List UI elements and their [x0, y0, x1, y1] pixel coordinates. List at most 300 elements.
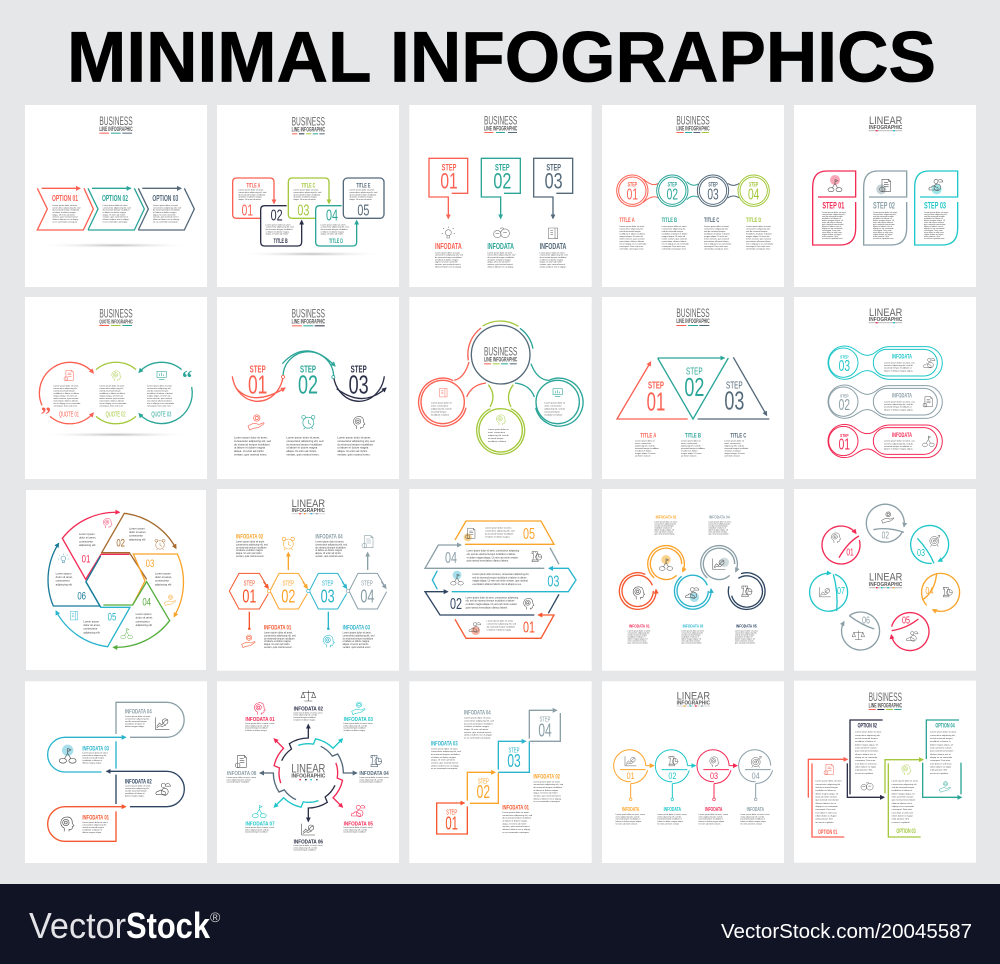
text block 1: Lorem ipsum dolor sit amet,	[52, 204, 78, 207]
text 03: Lorem ipsum dolor sit amet,	[82, 752, 108, 755]
info 1: do eiusmod tempor incididunt	[435, 256, 462, 259]
text block D: do eiusmod tempor incididunt	[321, 228, 348, 231]
step 01: 01	[445, 813, 458, 834]
column C: commodo consequat. Duis	[704, 247, 728, 250]
text block 3: ullamco laboris nisi ut	[924, 225, 943, 228]
panel: rounded step cards	[794, 105, 976, 287]
text 01: ut labore et dolore magna	[487, 629, 512, 632]
text block 2: Lorem ipsum dolor sit amet, con	[884, 400, 915, 403]
text block 2: eiusmod tempor incididunt ut	[884, 406, 912, 409]
item 01	[245, 703, 275, 732]
infodata 04: INFODATA 04	[315, 535, 343, 541]
text block 3: Lorem ipsum dolor sit amet,	[337, 436, 371, 440]
step 03 wave: STEP	[351, 365, 367, 376]
icon: bulb	[442, 227, 455, 238]
text block 2: dolore magna aliqua. Ut	[855, 743, 878, 746]
circle 03	[697, 750, 737, 801]
infodata 02: aliqua. Ut enim ad minim	[533, 792, 558, 795]
info 4: INFODATA	[747, 807, 764, 813]
panel: serpentine path	[25, 681, 207, 863]
column D: exercitation ullamco laboris	[746, 240, 771, 243]
column A: magna aliqua. Ut enim	[635, 452, 656, 455]
box 02	[261, 206, 302, 246]
item 06: Lorem ipsum dolor sit amet, conse	[293, 844, 323, 847]
infodata 04	[708, 514, 732, 535]
text block right: eiusmod tempor	[544, 410, 560, 413]
text block 2: consectetur adipiscing elit, sed	[286, 439, 324, 443]
column C: magna aliqua. Ut enim	[724, 452, 745, 455]
info 4: Lorem ipsum dolor sit amet, conse	[740, 813, 770, 816]
ring 02	[648, 546, 684, 580]
infodata 04: consectetur adipiscing elit, sed	[464, 719, 495, 722]
text block 3: sed do eiusmod tempor	[147, 389, 169, 392]
segment 02: 02	[116, 537, 125, 549]
info 1: consectetur adipiscing elit, sed	[435, 254, 463, 257]
circle 06: 06	[862, 615, 870, 626]
infodata 02: veniam, quis nostrud exerc.	[236, 555, 265, 558]
infodata 05: Lorem ipsum dolor sit amet,	[735, 629, 758, 632]
column D: incididunt ut labore et dolore	[746, 232, 773, 235]
infodata 04: consectetur adipiscing elit, sed	[315, 543, 348, 546]
text 02: et dolore magna aliqua. Ut enim ad minim veniam	[466, 603, 517, 606]
header logo: BUSINESS	[869, 690, 902, 704]
text block 2: magna aliqua. Ut enim ad	[99, 394, 123, 397]
text 04: et dolore magna aliqua. Ut enim ad minim veniam	[467, 556, 518, 559]
column B: consectetur adipiscing elit,	[662, 227, 686, 230]
text 04: sed do eiusmod tempor	[125, 720, 147, 723]
quotation mark open: “	[182, 367, 192, 389]
triangle step 01	[617, 362, 688, 419]
infodata 03: do eiusmod tempor incididunt	[431, 753, 460, 756]
infodata 04: INFODATA 04	[709, 514, 730, 519]
text block 3: sed do eiusmod tempor	[892, 786, 914, 789]
text block B	[266, 223, 294, 236]
info 3: Lorem ipsum dolor sit amet,	[540, 251, 565, 254]
text block D: ut labore et dolore magna	[321, 230, 345, 233]
info 3	[699, 807, 728, 825]
infodata 03: ut labore et dolore magna	[343, 640, 370, 643]
triangle step 02: STEP	[686, 366, 703, 377]
text block 1: aliqua. Ut enim ad minim	[52, 213, 75, 216]
text block 1: Lorem ipsum dolor sit amet, con	[884, 361, 915, 364]
text block 3: Lorem ipsum dolor sit amet,	[892, 780, 919, 783]
infodata 05	[735, 623, 758, 644]
icon: head	[112, 371, 121, 381]
text block D: aliqua. Ut enim ad minim	[321, 233, 343, 236]
circle step 03: 03	[707, 186, 719, 203]
circle 02: 02	[882, 530, 889, 541]
column A: amet, consectetur	[635, 442, 652, 445]
hexagon 03: STEP	[322, 579, 334, 588]
text 05: consectetur adipiscing elit, sed	[485, 529, 515, 532]
infodata 01: INFODATA 01	[629, 623, 650, 628]
info 3: INFODATA	[540, 241, 567, 251]
central circle with logo	[471, 325, 530, 384]
text block 1	[822, 211, 847, 240]
text block 2: consequat. Duis aute irure	[99, 404, 124, 407]
text block 3: nulla pariatur. Sint	[892, 818, 909, 821]
box 04	[316, 206, 357, 246]
info 1: INFODATA	[622, 807, 639, 813]
info 3: Ut enim ad minim veniam	[699, 822, 721, 825]
column C: TITLE C	[704, 217, 719, 224]
infodata 02: ut labore et dolore magna	[533, 789, 559, 792]
infodata 04: INFODATA 04	[125, 709, 152, 716]
text 03: incididunt ut labore et	[82, 759, 103, 762]
column A: minim veniam, quis nostrud	[619, 237, 644, 240]
circle 07: 07	[837, 586, 845, 597]
column B	[662, 217, 689, 250]
infodata 01: aliqua. Ut enim ad minim	[264, 643, 290, 646]
text block 2: nisi ut aliquip ex ea commodo	[99, 402, 127, 405]
step 03: STEP	[546, 163, 561, 173]
panel: zigzag rings	[602, 489, 784, 671]
text block 3: dolore magna aliqua. Ut	[924, 219, 946, 222]
text block 1: sectetur adipiscing elit, sed do	[884, 364, 914, 367]
text 04: Lorem ipsum dolor sit amet, consectetur adipiscing	[467, 550, 520, 553]
text block 2: Lorem ipsum dolor sit amet,	[873, 211, 898, 214]
infodata 01: sed do eiusmod tempor	[628, 633, 647, 636]
box 05: 05	[357, 202, 370, 219]
column C: Lorem ipsum dolor sit amet,	[704, 225, 730, 228]
capsule 03: STEP	[840, 355, 849, 361]
column C: Lorem ipsum dolor sit	[724, 440, 744, 443]
step 03: 03	[545, 169, 563, 194]
text block E: Lorem ipsum dolor sit amet,	[349, 189, 375, 192]
strip 03: 03	[547, 573, 559, 590]
step 02: 02	[477, 781, 490, 802]
header logo	[676, 306, 710, 326]
text 02: incididunt ut labore et	[125, 792, 145, 795]
chevron: option 01	[37, 188, 93, 230]
info 3: veniam, quis nostrud exercit	[540, 263, 566, 266]
text block 3: aliquip ex ea commodo	[924, 228, 945, 230]
card step 02	[864, 171, 907, 245]
item 02	[293, 690, 323, 721]
text 04	[125, 715, 151, 728]
infodata 01: ullamco laboris nisi ut aliquip	[502, 828, 531, 831]
info 1: Lorem ipsum dolor sit amet, conse	[616, 813, 645, 816]
circle step 04	[738, 175, 769, 206]
info 1: ctetur adipiscing elit, sed do	[616, 815, 639, 818]
text block D	[321, 223, 349, 236]
text 01	[82, 821, 108, 834]
capsule 03: INFODATA	[892, 354, 912, 361]
text block 1: veniam, quis nostrud exercit	[52, 216, 78, 219]
strip 02	[425, 592, 559, 615]
infodata 04: quis nostrud exercitation	[708, 532, 728, 535]
text block 2: ullamco laboris nisi ut	[855, 753, 876, 756]
item 05: Lorem ipsum dolor sit amet, conse	[343, 826, 373, 829]
text block 1: incididunt ut labore et	[815, 789, 836, 792]
infodata 03: ex ea commodo consequat.	[431, 767, 458, 770]
circle step 01: STEP	[628, 183, 637, 189]
column D	[746, 217, 774, 250]
text 05	[485, 526, 515, 538]
text block 3: nisi ut aliquip ex ea commodo	[147, 402, 175, 405]
info 3: ctetur adipiscing elit, sed do	[699, 815, 722, 818]
text block B: do eiusmod tempor incididunt	[266, 228, 293, 231]
text block 1: eiusmod tempor incididunt ut	[884, 367, 912, 370]
strip 03	[432, 568, 576, 592]
header logo: LINEAR	[292, 498, 325, 510]
text block 1: aliquip ex ea commodo	[822, 228, 843, 230]
quote 01 arcs	[39, 362, 93, 424]
connector 01	[242, 612, 255, 648]
text block 2	[884, 400, 915, 411]
circle 06	[842, 612, 880, 650]
text block bottom: Lorem ipsum dolor sit	[488, 428, 509, 431]
item 05: ctetur adipiscing elit, sed do	[343, 828, 367, 831]
text block 1: Lorem ipsum dolor sit amet,	[822, 211, 847, 214]
column B: magna aliqua. Ut enim	[681, 452, 702, 455]
infodata 02: Lorem ipsum dolor sit amet,	[533, 780, 561, 783]
arrow segment east	[321, 746, 357, 773]
info 2	[657, 807, 687, 825]
header logo: BUSINESS	[484, 113, 517, 127]
text block 4: ullamco laboris nisi ut	[930, 753, 951, 756]
text block 1: Lorem ipsum dolor sit amet,	[53, 384, 79, 387]
circle 07	[810, 573, 848, 611]
text 02: consectetur	[129, 534, 143, 538]
box 02: 02	[271, 208, 283, 225]
info 2: INFODATA	[487, 241, 514, 251]
node 2	[332, 375, 335, 378]
text 05: do eiusmod tempor incididunt	[485, 532, 514, 535]
info 3: aliqua. Ut enim ad minim	[540, 261, 562, 264]
infodata 04	[315, 535, 348, 558]
text 04: adipiscing elit	[136, 623, 152, 627]
shadow	[35, 243, 195, 248]
text 01: Lorem ipsum	[79, 532, 95, 536]
column C: eiusmod tempor incididunt	[724, 447, 749, 450]
column D: magna aliqua. Ut enim ad	[746, 235, 769, 238]
text 03	[472, 573, 529, 586]
item 08: Lorem ipsum dolor sit amet, conse	[227, 776, 256, 779]
text 03: consectetur adipiscing elit,	[82, 754, 107, 757]
text block 3	[892, 780, 919, 824]
option 02	[847, 720, 884, 797]
item 08: eiusmod tempor incididunt	[227, 781, 250, 784]
info 4: eiusmod tempor incididunt ut	[740, 818, 765, 821]
text block 1: consectetur adipiscing elit,	[53, 387, 78, 390]
infodata 05: enim ad minim veniam	[735, 640, 754, 642]
text block B: consectetur adipiscing elit, sed	[266, 226, 294, 229]
text block 3: enim ad minim veniam	[892, 796, 913, 798]
shadow	[38, 432, 194, 437]
strip 01: 01	[523, 620, 535, 637]
infodata 01: do eiusmod tempor incididunt	[264, 637, 295, 640]
connector 03	[323, 612, 334, 647]
infodata 01: aliqua. Ut enim ad minim	[502, 822, 527, 825]
item 04: eiusmod tempor incididunt	[359, 781, 382, 784]
text block 2: do eiusmod tempor incididunt	[286, 442, 322, 446]
header logo: LINE INFOGRAPHIC	[99, 127, 133, 133]
connector 02	[282, 537, 294, 570]
text block 2: enim ad minim veniam	[855, 747, 877, 749]
text block left: Lorem ipsum dolor sit	[431, 401, 452, 404]
text block 2: sed do eiusmod tempor	[855, 737, 878, 740]
segment 01	[62, 512, 129, 579]
text block 1: incididunt ut labore et	[822, 217, 841, 220]
text block 1: ullamco laboris nisi ut	[822, 225, 841, 228]
step 01: STEP	[446, 808, 457, 817]
text block 1: occaecat cupidatat non	[822, 237, 842, 240]
header logo: BUSINESS	[99, 114, 133, 128]
text block C: aliqua. Ut enim ad minim	[293, 198, 316, 201]
text 01: consectetur adipiscing elit, sed	[487, 623, 517, 626]
item 04: Lorem ipsum dolor sit amet, conse	[359, 776, 389, 779]
infodata 02	[533, 774, 564, 803]
column B: exercitation ullamco laboris	[662, 240, 686, 243]
text block 1: sed do eiusmod tempor	[822, 215, 843, 218]
infodata 03: INFODATA 03	[431, 741, 458, 748]
column C	[724, 433, 749, 458]
connectors	[643, 179, 739, 202]
text 03: exercitation ullamco laboris nisi ut aliquip ex ea.	[472, 583, 522, 586]
infodata 01: do eiusmod tempor incididunt	[502, 817, 531, 820]
text block 2: aliquip ex ea commodo	[873, 228, 894, 230]
info 4: Ut enim ad minim veniam	[740, 822, 762, 825]
circle step 04: STEP	[749, 183, 758, 189]
text 06: consectetur	[56, 579, 70, 583]
text block 3: consectetur adipiscing elit,	[147, 387, 171, 390]
infodata 01: ut labore et dolore magna	[502, 819, 528, 822]
infodata 02: ut labore et dolore magna	[236, 549, 263, 552]
column A: consequat. Duis aute irure	[619, 245, 644, 248]
item 07: ctetur adipiscing elit, sed do	[245, 828, 269, 831]
circle 03	[911, 525, 949, 563]
hexagon 04: STEP	[361, 579, 373, 588]
text block A: ut labore et dolore magna	[238, 196, 263, 199]
header logo	[292, 114, 325, 134]
item 07: Lorem ipsum dolor sit amet, conse	[245, 826, 274, 829]
panel: quote arcs	[25, 297, 207, 479]
info 2: ullamco laboris nisi ut aliquip	[487, 265, 514, 268]
text 06: dolor sit amet,	[56, 575, 73, 579]
column A: adipiscing elit, sed do	[635, 445, 655, 448]
circle 05: 05	[902, 615, 910, 626]
infodata 05: INFODATA 05	[736, 623, 757, 628]
text block 3: consectetur adipiscing elit, sed	[337, 439, 375, 443]
infodata 02: Lorem ipsum dolor sit amet,	[654, 520, 678, 523]
text block 3: ullamco laboris nisi ut aliquip	[153, 218, 180, 221]
text 02: consectetur adipiscing elit,	[125, 787, 150, 790]
infodata 03	[343, 625, 375, 649]
text block 1: Lorem ipsum dolor sit amet,	[815, 780, 842, 783]
column C: adipiscing elit, sed do	[724, 445, 745, 448]
text block 3: nulla pariatur. Sint	[924, 235, 940, 238]
text block 1: irure dolor in velit esse	[815, 811, 838, 814]
hexagon 02: 02	[281, 585, 295, 606]
center logo: INFOGRAPHIC	[291, 773, 325, 779]
step 02: 02	[493, 169, 511, 194]
hexagon 01: 01	[242, 585, 256, 606]
header logo: LINE INFOGRAPHIC	[869, 703, 902, 709]
text block 2: aliquip ex ea commodo	[855, 757, 878, 759]
column A: ad minim veniam	[635, 456, 651, 458]
chevron: option 03: OPTION 03	[152, 193, 179, 203]
text block 1	[234, 436, 272, 456]
column C: consequat. Duis aute irure	[704, 245, 729, 248]
infodata 03: aliqua. Ut enim ad minim	[431, 759, 455, 762]
column B: ad minim veniam	[681, 456, 697, 458]
text block 3	[147, 384, 175, 407]
text 04: Lorem ipsum dolor sit amet,	[125, 715, 151, 718]
text block 2: veniam, quis nostrud exerc.	[286, 452, 320, 456]
text block 1: enim ad minim veniam	[815, 796, 837, 798]
capsule 03: 03	[839, 358, 850, 375]
text 01: Lorem ipsum dolor sit amet,	[82, 821, 108, 824]
triangle step 03: STEP	[726, 381, 743, 392]
strip 01	[455, 615, 554, 638]
info 1: Ut enim ad minim veniam	[616, 822, 638, 825]
step 03 wave: 03	[349, 370, 369, 400]
triangle step 02	[658, 358, 728, 419]
text block 1: labore et dolore magna aliqua.	[884, 369, 914, 372]
text block 3: aliqua. Ut enim ad minim	[337, 449, 368, 453]
text 04: consectetur adipiscing elit,	[125, 717, 150, 720]
hexagon 02: STEP	[282, 579, 294, 588]
step 04: 04	[538, 719, 552, 740]
circle 01	[822, 526, 860, 564]
text 03	[82, 752, 108, 765]
text block 2: consectetur adipiscing elit,	[99, 387, 124, 390]
infodata 02	[236, 535, 268, 558]
header logo: LINE INFOGRAPHIC	[676, 126, 710, 132]
triangle step 02: 02	[684, 372, 704, 402]
step 02	[481, 158, 520, 218]
text block right: adipiscing elit, sed do	[544, 407, 566, 410]
panel: eight-way radial	[217, 681, 399, 863]
text block 4: quis nostrud exercitation	[930, 750, 954, 753]
segment 03: 03	[146, 558, 154, 570]
item 08: ctetur adipiscing elit, sed do	[227, 778, 250, 781]
info 1: Lorem ipsum dolor sit amet,	[435, 251, 461, 254]
chevron: option 03	[138, 188, 194, 230]
column C: minim veniam, quis nostrud	[704, 237, 729, 240]
text 01: Lorem ipsum dolor sit amet,	[487, 620, 514, 623]
title: MINIMAL INFOGRAPHICS	[67, 18, 936, 98]
text block 1: enim ad minim veniam	[822, 222, 842, 224]
text block 2: consequat. Duis aute	[855, 759, 876, 762]
infodata 02: do eiusmod tempor incididunt	[236, 546, 267, 549]
step 02	[467, 772, 498, 803]
panel: option chevrons	[25, 105, 207, 287]
text block B: Lorem ipsum dolor sit amet,	[266, 223, 291, 226]
panel: staircase steps	[409, 681, 592, 863]
text block 2	[855, 731, 882, 775]
infodata 01	[48, 807, 126, 841]
text block A: aliqua. Ut enim ad minim	[238, 198, 261, 201]
column A: exercitation ullamco laboris	[619, 240, 644, 243]
text 06: Lorem ipsum	[56, 571, 72, 575]
text 04: dolore magna aliqua.	[125, 725, 145, 728]
infodata 04: do eiusmod tempor incididunt	[315, 546, 346, 549]
header logo	[869, 307, 902, 323]
text block 2: quis nostrud exercitation	[855, 750, 879, 753]
item 06: eiusmod tempor incididunt	[293, 849, 316, 852]
column C: TITLE C	[730, 433, 746, 440]
text 01: dolore magna aliqua.	[82, 831, 102, 834]
text 04	[467, 550, 520, 563]
segment 03	[133, 554, 183, 617]
circle 03: 03	[710, 771, 718, 781]
card step 01	[813, 171, 856, 245]
text block 3: occaecat cupidatat	[892, 821, 910, 824]
header logo	[292, 306, 325, 326]
text block 1: sed do eiusmod tempor	[815, 786, 838, 789]
